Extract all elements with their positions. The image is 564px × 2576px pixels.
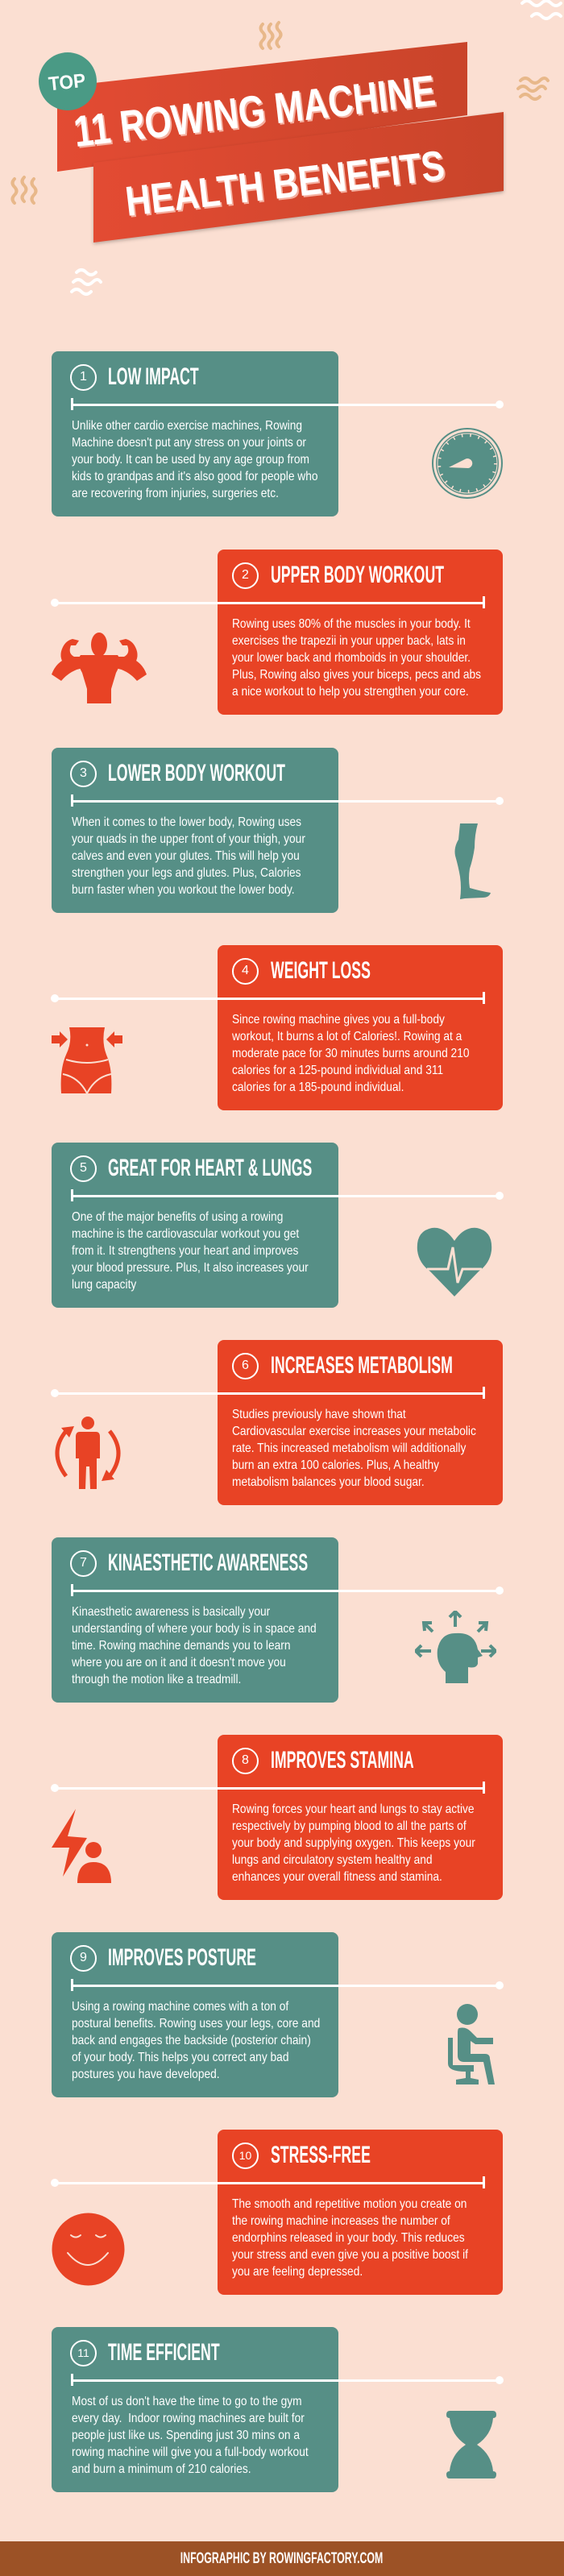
heading: LOW IMPACT — [108, 363, 199, 390]
number badge — [70, 1945, 97, 1972]
body text — [72, 2000, 320, 2081]
panel box — [218, 1735, 503, 1900]
icon: head with arrows — [415, 1611, 496, 1683]
heading: STRESS-FREE — [271, 2142, 371, 2168]
body text: Studies previously have shown that — [232, 1408, 406, 1421]
number badge — [70, 761, 97, 787]
icon: leg — [454, 823, 491, 899]
body text: through the motion like a treadmill. — [72, 1673, 241, 1686]
body text: burn faster when you workout the lower body. — [72, 883, 295, 897]
body text: Rowing forces your heart and lungs to stay active — [232, 1802, 475, 1816]
number badge: 4 — [242, 964, 249, 977]
body text: strengthen your legs and glutes. Plus, Calories — [72, 866, 301, 880]
body text: postural benefits. Rowing uses your legs, core and — [72, 2017, 320, 2031]
icon: seated person — [448, 2004, 495, 2084]
section 1: low impact — [52, 351, 504, 516]
body text: calories for a 125-pound individual and 311 — [232, 1064, 443, 1077]
section 9: posture — [52, 1932, 504, 2097]
body text: kids to grandpas and it's also good for people who — [72, 470, 318, 483]
number badge — [70, 1550, 97, 1577]
panel box — [52, 1143, 338, 1308]
body text: Machine doesn't put any stress on your joints or — [72, 436, 306, 450]
body text: respectively by pumping blood to all the parts of — [232, 1819, 467, 1833]
number badge: 7 — [80, 1556, 87, 1570]
heading: KINAESTHETIC AWARENESS — [108, 1549, 308, 1576]
body text: Unlike other cardio exercise machines, Rowing — [72, 419, 302, 433]
banner 2: HEALTH BENEFITS — [125, 144, 449, 227]
banner 1: 11 ROWING MACHINE — [73, 68, 439, 158]
body text: One of the major benefits of using a rowing — [72, 1210, 283, 1224]
section 3: lower body workout — [52, 748, 504, 913]
banner 1: 11 ROWING MACHINE — [71, 66, 438, 156]
icon: waist — [52, 1027, 122, 1093]
number badge: 6 — [242, 1359, 249, 1372]
number badge — [70, 2340, 97, 2367]
body text: people just like us. Spending just 30 mins on a — [72, 2429, 300, 2442]
heading: TIME EFFICIENT — [108, 2339, 220, 2366]
body text: Most of us don't have the time to go to the gym — [72, 2395, 302, 2408]
body text: Kinaesthetic awareness is basically your — [72, 1605, 270, 1619]
body text — [232, 617, 481, 699]
section 11: time efficient — [52, 2327, 504, 2492]
body text: burn an extra 100 calories. Plus, A healthy — [232, 1458, 439, 1472]
body text: rowing machine will give you a full-body workout — [72, 2445, 309, 2459]
body text — [72, 1605, 317, 1686]
body text: Rowing uses 80% of the muscles in your body. It — [232, 617, 471, 631]
section 8: stamina — [51, 1735, 503, 1900]
body text: rate. This increased metabolism will additionally — [232, 1441, 466, 1455]
top badge — [39, 52, 97, 110]
body text: of your body. This helps you correct any bad — [72, 2051, 288, 2064]
icon: gauge — [432, 428, 503, 499]
body text: endorphins released in your body. This reduces — [232, 2231, 465, 2245]
body text: machine is the cardiovascular workout you get — [72, 1227, 299, 1241]
body text: When it comes to the lower body, Rowing uses — [72, 815, 301, 829]
number badge: 11 — [77, 2346, 89, 2359]
number badge — [232, 1353, 259, 1379]
number badge: 8 — [242, 1753, 249, 1767]
body text: Plus, Rowing also gives your biceps, pecs and abs — [232, 668, 481, 682]
body text: The smooth and repetitive motion you create on — [232, 2197, 467, 2211]
body text: calves and even your glutes. This will help you — [72, 849, 300, 863]
top badge: TOP — [48, 70, 87, 95]
body text: understanding of where your body is in space and — [72, 1622, 317, 1636]
body text — [232, 2197, 468, 2279]
number badge: 5 — [80, 1161, 87, 1175]
body text — [232, 1013, 469, 1094]
body text: metabolism balances your blood sugar. — [232, 1475, 425, 1489]
body text: postures you have developed. — [72, 2068, 220, 2081]
body text: every day. Indoor rowing machines are built for — [72, 2412, 305, 2425]
body text — [72, 1210, 309, 1292]
panel box — [218, 945, 503, 1110]
number badge — [70, 364, 97, 391]
banner 2: HEALTH BENEFITS — [123, 143, 447, 226]
body text: Using a rowing machine comes with a ton of — [72, 2000, 288, 2014]
body text — [72, 815, 305, 897]
heading: IMPROVES STAMINA — [271, 1747, 414, 1773]
heading: GREAT FOR HEART & LUNGS — [108, 1155, 312, 1181]
body text: Since rowing machine gives you a full-body — [232, 1013, 445, 1027]
body text: calories for a 185-pound individual. — [232, 1081, 404, 1094]
body text: exercises the trapezii in your upper back, lats in — [232, 634, 466, 648]
icon: smiling face — [52, 2213, 124, 2285]
heading: LOWER BODY WORKOUT — [108, 760, 285, 786]
footer — [0, 2541, 564, 2576]
number badge: 1 — [80, 370, 87, 384]
number badge: 10 — [239, 2149, 251, 2162]
section 6: metabolism — [51, 1340, 503, 1505]
icon: person with arrows — [55, 1417, 121, 1489]
number badge — [70, 1155, 97, 1182]
number badge — [232, 2143, 259, 2169]
icon: muscle man — [52, 633, 147, 703]
panel box — [52, 748, 338, 913]
body text: your lower back and rhomboids in your shoulder. — [232, 651, 471, 665]
body text: the rowing machine increases the number of — [232, 2214, 450, 2228]
body text: and burn a minimum of 210 calories. — [72, 2462, 251, 2476]
body text: your quads in the upper front of your thigh, your — [72, 832, 305, 846]
panel box — [218, 1340, 503, 1505]
section 5: heart & lungs — [52, 1143, 504, 1308]
body text: from it. It strengthens your heart and improves — [72, 1244, 298, 1258]
body text: your blood pressure. Plus, It also increases your — [72, 1261, 309, 1275]
body text: Cardiovascular exercise increases your metabolic — [232, 1425, 476, 1438]
body text — [232, 1802, 475, 1884]
panel box — [52, 351, 338, 516]
number badge: 3 — [80, 766, 87, 780]
heading: INCREASES METABOLISM — [271, 1352, 453, 1379]
number badge — [232, 958, 259, 985]
body text: time. Rowing machine demands you to learn — [72, 1639, 291, 1653]
body text — [72, 419, 318, 500]
body text: you are feeling depressed. — [232, 2265, 363, 2279]
heading: WEIGHT LOSS — [271, 957, 371, 984]
body text: lungs and circulatory system healthy and — [232, 1853, 433, 1867]
body text: back and engages the backside (posterior chain) — [72, 2034, 311, 2047]
body text: your body and supplying oxygen. This keeps your — [232, 1836, 475, 1850]
header — [10, 0, 562, 296]
section 10: stress-free — [51, 2130, 503, 2295]
section 4: weight loss — [51, 945, 503, 1110]
body text: your stress and even give you a positive boost if — [232, 2248, 468, 2262]
icon: bolt and person — [52, 1809, 111, 1883]
heading: IMPROVES POSTURE — [108, 1944, 256, 1971]
body text: are recovering from injuries, surgeries etc. — [72, 487, 279, 500]
panel box — [218, 550, 503, 715]
body text: enhances your overall fitness and stamina. — [232, 1870, 442, 1884]
footer: INFOGRAPHIC BY ROWINGFACTORY.COM — [180, 2550, 384, 2567]
body text: workout, It burns a lot of Calories!. Rowing at a — [232, 1030, 462, 1043]
section 2: upper body workout — [51, 550, 503, 715]
body text — [72, 2395, 309, 2476]
number badge — [232, 562, 259, 589]
panel box — [218, 2130, 503, 2295]
body text: where you are on it and it doesn't move you — [72, 1656, 286, 1670]
icon: hourglass — [446, 2411, 496, 2479]
body text: moderate pace for 30 minutes burns around 210 — [232, 1047, 469, 1060]
number badge: 9 — [80, 1951, 87, 1964]
number badge — [232, 1748, 259, 1774]
panel box — [52, 1537, 338, 1703]
panel box — [52, 2327, 338, 2492]
number badge: 2 — [242, 568, 249, 582]
heading: UPPER BODY WORKOUT — [271, 562, 444, 588]
body text: lung capacity — [72, 1278, 136, 1292]
banner 1 — [57, 42, 467, 172]
body text: a nice workout to help you strengthen your core. — [232, 685, 469, 699]
panel box — [52, 1932, 338, 2097]
body text: your body. It can be used by any age group from — [72, 453, 309, 467]
squiggle decorations — [13, 1, 561, 294]
body text — [232, 1408, 476, 1489]
banner 2 — [93, 112, 504, 243]
section 7: kinaesthetic awareness — [52, 1537, 504, 1703]
icon: heart — [417, 1228, 491, 1296]
